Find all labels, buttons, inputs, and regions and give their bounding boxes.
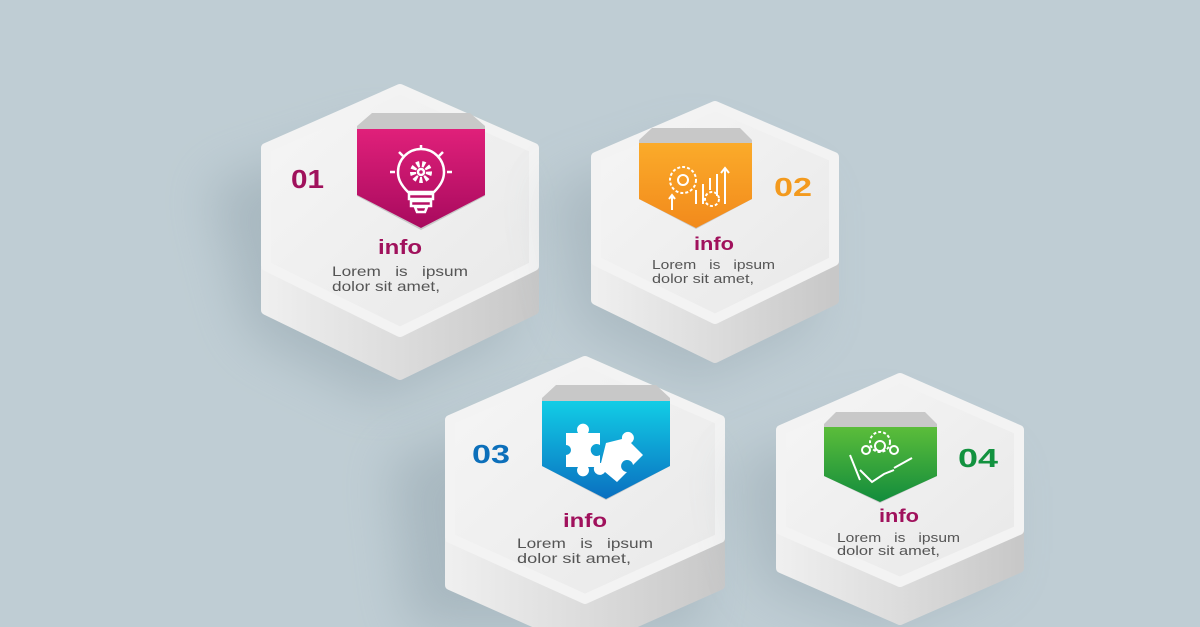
icon: growth gears: [639, 143, 752, 228]
text block: Lorem is ipsum: [517, 535, 653, 551]
panel: step 02: [550, 106, 834, 380]
number 03: 03: [472, 439, 510, 469]
icon: puzzle pieces: [542, 401, 670, 499]
number 04: 04: [958, 443, 999, 473]
heading: info: info: [378, 237, 422, 259]
icon: teamwork handshake: [824, 427, 937, 502]
panel: step 04: [735, 378, 1019, 627]
panel: step 03: dolor sit amet,: [517, 550, 631, 566]
text block: Lorem is ipsum: [332, 263, 468, 279]
text block: Lorem is ipsum: [652, 257, 775, 272]
panel: step 02: dolor sit amet,: [652, 271, 754, 286]
panel: step 01: dolor sit amet,: [332, 278, 440, 294]
icon: lightbulb with gear: [357, 129, 485, 228]
panel: step 04: dolor sit amet,: [837, 543, 940, 558]
heading: info: info: [879, 506, 919, 526]
number 01: 01: [291, 164, 324, 194]
panel: step 01: [210, 89, 534, 400]
text block: Lorem is ipsum: [837, 530, 960, 545]
panel: step 03: [390, 361, 720, 627]
number 02: 02: [774, 172, 812, 202]
heading: info: info: [694, 234, 734, 254]
heading: info: info: [563, 511, 607, 532]
